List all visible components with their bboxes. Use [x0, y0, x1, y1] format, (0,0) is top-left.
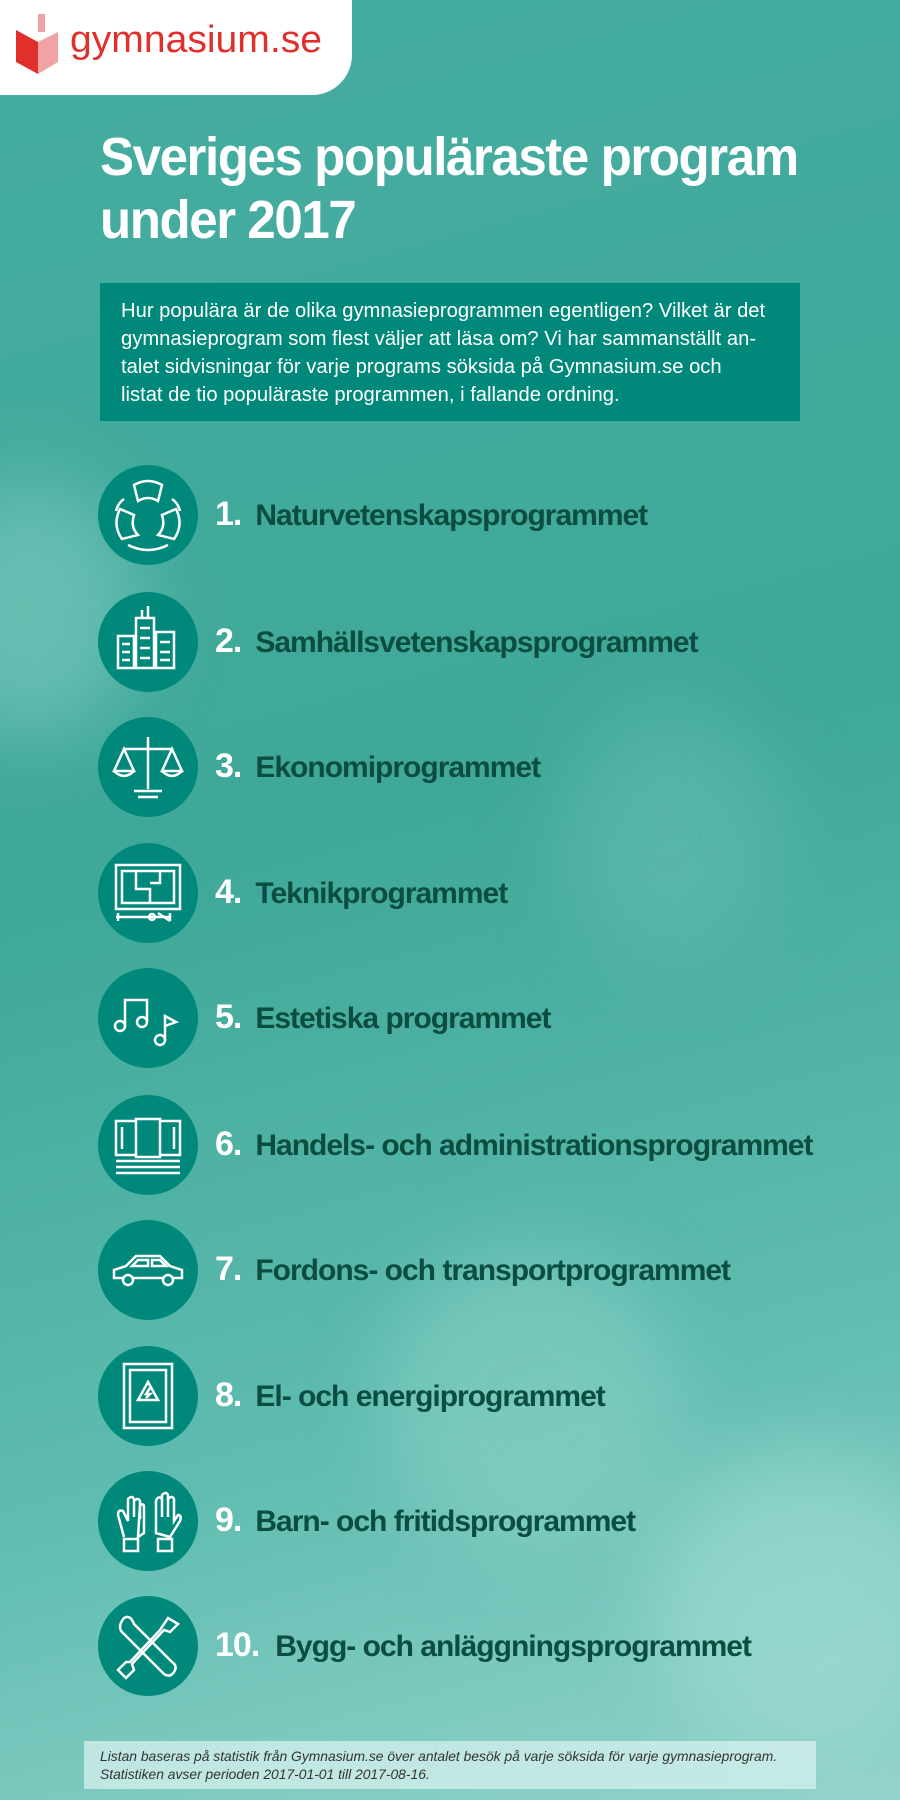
item 8 [98, 1346, 606, 1446]
footer note [84, 1741, 816, 1789]
item 9: 9. Barn- och fritidsprogrammet [215, 1501, 635, 1539]
logo [0, 0, 352, 95]
item 1 [98, 465, 648, 565]
icon: music notes [98, 968, 198, 1068]
item 5 [98, 968, 552, 1068]
icon: wrench and screwdriver [98, 1596, 198, 1696]
item 8: 8. El- och energiprogrammet [215, 1376, 605, 1414]
item 3 [98, 717, 541, 817]
icon: book logo [16, 14, 58, 74]
intro box [100, 283, 800, 421]
intro box: Hur populära är de olika gymnasieprogrammen egentligen? Vilket är det [121, 300, 765, 322]
icon: scales [98, 717, 198, 817]
intro box: listat de tio populäraste programmen, i fallande ordning. [121, 384, 620, 406]
title: Sveriges populäraste program [100, 127, 798, 187]
item 6 [98, 1095, 814, 1195]
title: under 2017 [100, 190, 355, 250]
item 10: 10. Bygg- och anläggningsprogrammet [215, 1626, 751, 1664]
title [100, 127, 798, 250]
item 3: 3. Ekonomiprogrammet [215, 747, 540, 785]
intro box: gymnasieprogram som flest väljer att läsa om? Vi har sammanställt an- [121, 328, 756, 350]
footer note: Statistiken avser perioden 2017-01-01 till 2017-08-16. [100, 1766, 430, 1782]
item 9 [98, 1471, 636, 1571]
item 5: 5. Estetiska programmet [215, 998, 550, 1036]
icon: car [98, 1220, 198, 1320]
item 10 [98, 1596, 752, 1696]
item 4 [98, 843, 508, 943]
logo text: gymnasium.se [70, 19, 322, 61]
icon: blueprint [98, 843, 198, 943]
intro box: talet sidvisningar för varje programs söksida på Gymnasium.se och [121, 356, 722, 378]
icon: leaves cycle [98, 465, 198, 565]
icon: money stack [98, 1095, 198, 1195]
item 2: 2. Samhällsvetenskapsprogrammet [215, 622, 698, 660]
item 6: 6. Handels- och administrationsprogrammet [215, 1125, 812, 1163]
item 7 [98, 1220, 731, 1320]
icon: buildings [98, 592, 198, 692]
icon: electrical box [98, 1346, 198, 1446]
icon: hands [98, 1471, 198, 1571]
item 2 [98, 592, 698, 692]
item 7: 7. Fordons- och transportprogrammet [215, 1250, 730, 1288]
item 4: 4. Teknikprogrammet [215, 873, 507, 911]
item 1: 1. Naturvetenskapsprogrammet [215, 495, 647, 533]
footer note: Listan baseras på statistik från Gymnasium.se över antalet besök på varje söksida för varje gymnasieprogram. [100, 1748, 777, 1764]
